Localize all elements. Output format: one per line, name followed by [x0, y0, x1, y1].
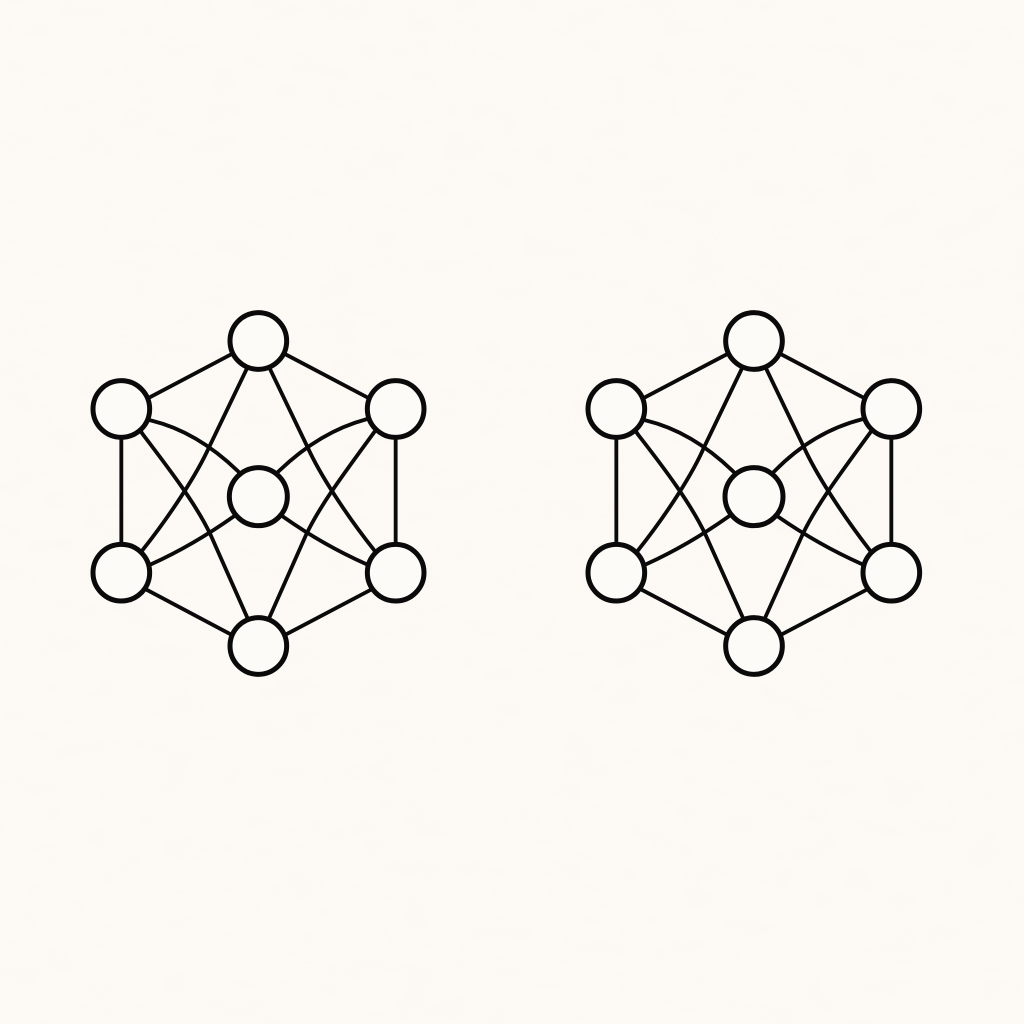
- connecting lines: right diagram: [616, 340, 891, 649]
- connecting lines: left diagram: [121, 340, 396, 649]
- nodes: right diagram: [588, 313, 920, 674]
- nodes: left diagram: [93, 313, 424, 674]
- network diagram: left: [93, 313, 424, 674]
- network diagram: right: [588, 313, 920, 674]
